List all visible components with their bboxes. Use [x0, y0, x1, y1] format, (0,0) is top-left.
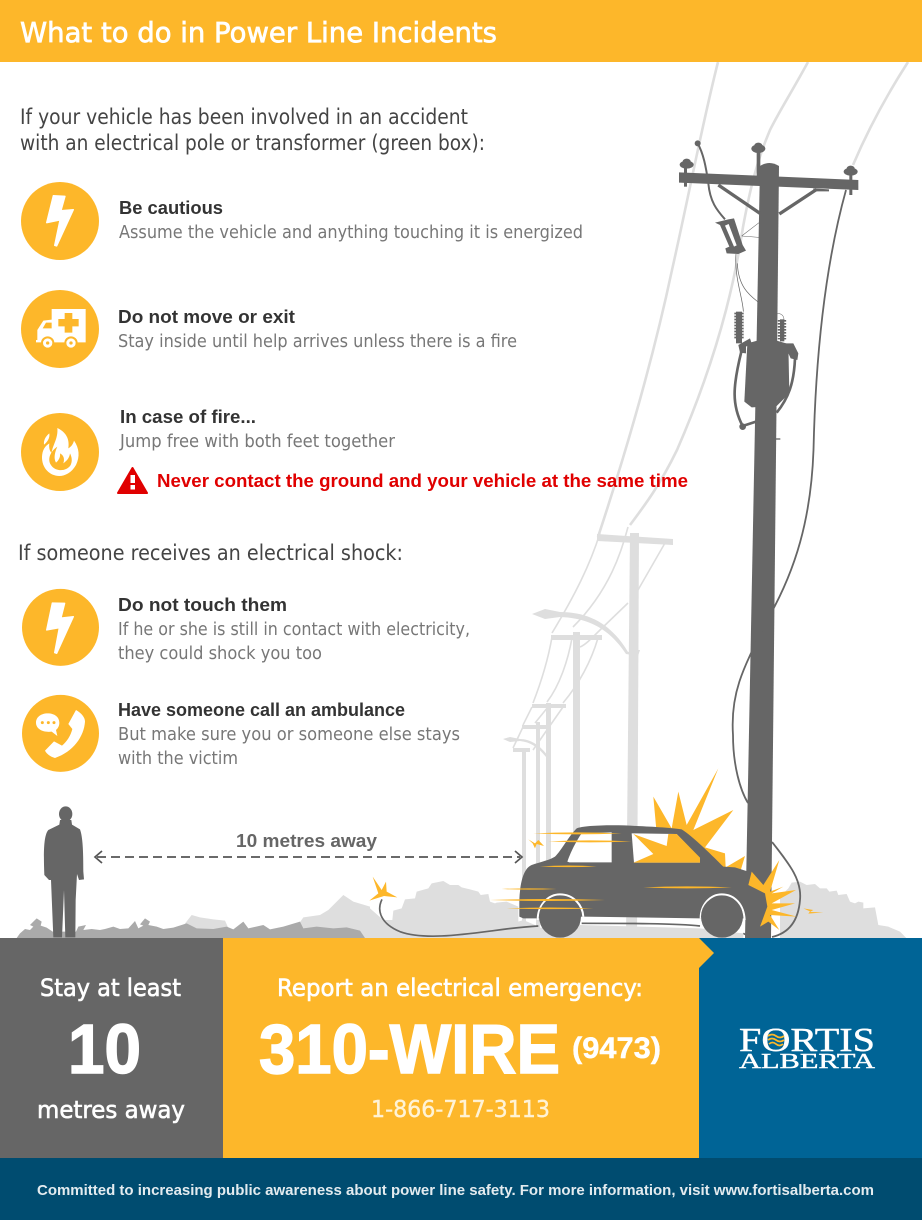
- step: do not touch them: Do not touch them: [118, 595, 287, 615]
- warning: never contact: Never contact the ground and your vehicle at the same time: [157, 470, 688, 491]
- ground strip beside person: [17, 895, 370, 938]
- step: call an ambulance: [22, 695, 460, 772]
- distant power poles and wires: [503, 62, 908, 938]
- step: call an ambulance: But make sure you or someone else stays: [118, 725, 460, 745]
- icon: lightning bolt: [21, 182, 99, 260]
- icon: warning triangle: [118, 468, 147, 493]
- distance arrow: [95, 851, 522, 863]
- panel: report emergency: 310-WIRE: [259, 1010, 560, 1088]
- step: do not move or exit: Do not move or exit: [118, 307, 295, 327]
- logo: FortisAlberta: [739, 1022, 876, 1073]
- step: do not touch them: they could shock you too: [118, 644, 322, 664]
- ground wire: [380, 899, 752, 938]
- person silhouette: [44, 806, 84, 937]
- step: call an ambulance: Have someone call an ambulance: [118, 700, 405, 720]
- energized wire from pole: [733, 190, 846, 937]
- icon: phone with speech bubble: [22, 695, 99, 772]
- step: be cautious: [21, 182, 583, 260]
- icon: flame: [21, 413, 99, 491]
- logo: FortisAlberta: FORTIS: [739, 1022, 875, 1059]
- section heading: vehicle accident: with an electrical pole or transformer (green box):: [20, 131, 485, 155]
- distance label: 10 metres away: [236, 831, 377, 851]
- step: do not touch them: If he or she is still in contact with electricity,: [118, 620, 470, 640]
- panel: stay at least 10 metres: Stay at least: [40, 974, 181, 1002]
- section heading: vehicle accident: [20, 105, 485, 155]
- panel: report emergency: 1-866-717-3113: [371, 1097, 550, 1123]
- step: in case of fire: [21, 407, 396, 491]
- panel: stay at least 10 metres: [0, 938, 223, 1158]
- step: do not move or exit: [21, 290, 517, 368]
- step: in case of fire: Jump free with both feet together: [119, 432, 396, 452]
- step: do not touch them: [22, 589, 470, 666]
- step: do not move or exit: Stay inside until help arrives unless there is a fire: [118, 332, 517, 352]
- car: [519, 825, 768, 938]
- impact burst and sparks: [369, 832, 823, 930]
- panel: report emergency: [223, 938, 699, 1158]
- footer: [0, 1158, 922, 1220]
- section heading: electrical shock: If someone receives an electrical shock:: [18, 541, 403, 565]
- step: call an ambulance: with the victim: [118, 749, 238, 769]
- power pole with equipment: [679, 140, 858, 938]
- panel: logo: [699, 938, 922, 1158]
- panel: stay at least 10 metres: metres away: [37, 1096, 185, 1124]
- step: in case of fire: In case of fire...: [120, 407, 256, 427]
- icon: ambulance: [21, 290, 99, 368]
- panel: report emergency: Report an electrical emergency:: [277, 974, 643, 1002]
- ground bushes: [360, 881, 907, 938]
- footer: Committed to increasing public awareness about power line safety. For more information, visit www.fortisalberta.com: [37, 1182, 874, 1199]
- step: be cautious: Be cautious: [119, 198, 223, 218]
- panel: report emergency: (9473): [572, 1032, 661, 1065]
- icon: lightning bolt: [22, 589, 99, 666]
- panel: stay at least 10 metres: 10: [68, 1010, 141, 1088]
- logo: FortisAlberta: ALBERTA: [739, 1049, 876, 1073]
- step: be cautious: Assume the vehicle and anything touching it is energized: [119, 223, 583, 243]
- section heading: vehicle accident: If your vehicle has been involved in an accident: [20, 105, 468, 129]
- title banner: [0, 0, 922, 62]
- title banner: What to do in Power Line Incidents: [20, 16, 497, 49]
- explosion behind car: [653, 768, 745, 873]
